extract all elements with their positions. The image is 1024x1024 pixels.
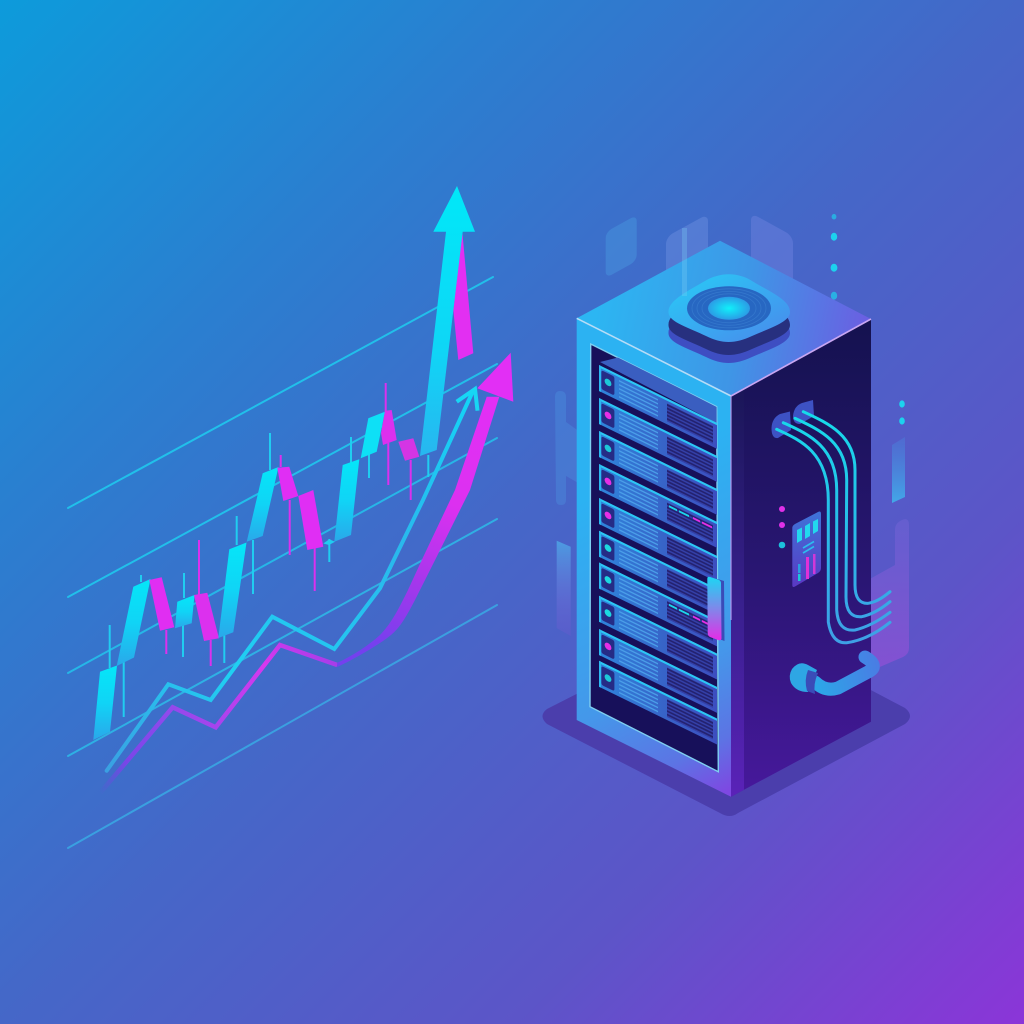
unit 10 [599,661,717,745]
fan disc [687,286,771,330]
floating dots [831,214,905,425]
door handle [707,577,724,641]
big cyan arrow [420,186,475,456]
unit 1 [599,365,717,449]
magenta growth arrow [100,353,513,793]
cyan growth line with arrow [107,389,477,771]
panel left lower [557,541,571,636]
unit 5 [599,498,717,582]
fan center [708,297,750,320]
magenta thick line [337,397,499,667]
rack interior [590,344,718,772]
fan [668,228,790,363]
unit 4 [599,464,717,548]
magenta arrow head [477,353,513,402]
fan top [668,274,790,342]
right face corner strip [731,389,744,797]
panel right small bar [892,437,905,503]
candlestick chart [93,186,475,740]
pipe [815,657,873,689]
unit 8 [599,596,717,680]
pipe cap [790,663,817,692]
unit 7 [599,562,717,646]
rack top face [577,241,871,396]
server units [599,365,717,745]
right face details [772,400,890,694]
candle bodies [93,410,419,740]
indicator dots [779,506,785,548]
status card [792,512,821,587]
magenta thin line [100,645,337,793]
unit 3 [599,431,717,515]
fan light beam [682,228,687,296]
rack interior ledge [600,357,717,423]
fan shadow [668,295,790,363]
cables [777,412,890,643]
floor shadow [542,618,910,816]
rack edge highlights [577,318,871,620]
rack door frame [577,318,731,797]
rack right face [731,319,871,797]
floating translucent panels [555,213,909,672]
fan rings [692,289,766,328]
candle wicks cyan [110,433,428,717]
big magenta sliver [453,232,473,360]
unit 9 [599,629,717,713]
unit 6 [599,531,717,615]
server rack [577,241,871,797]
panel top mid [666,214,708,322]
side pipe handle [790,657,873,694]
candle wicks magenta [166,383,411,666]
panel right purple [868,519,909,672]
panel top left [606,215,637,278]
panel top right [751,213,793,298]
pipe collar [806,670,818,694]
fan side [668,287,790,355]
trend grid lines [68,277,497,848]
cable ports [772,400,814,438]
panel left upper [555,391,580,505]
unit 2 [599,398,717,482]
